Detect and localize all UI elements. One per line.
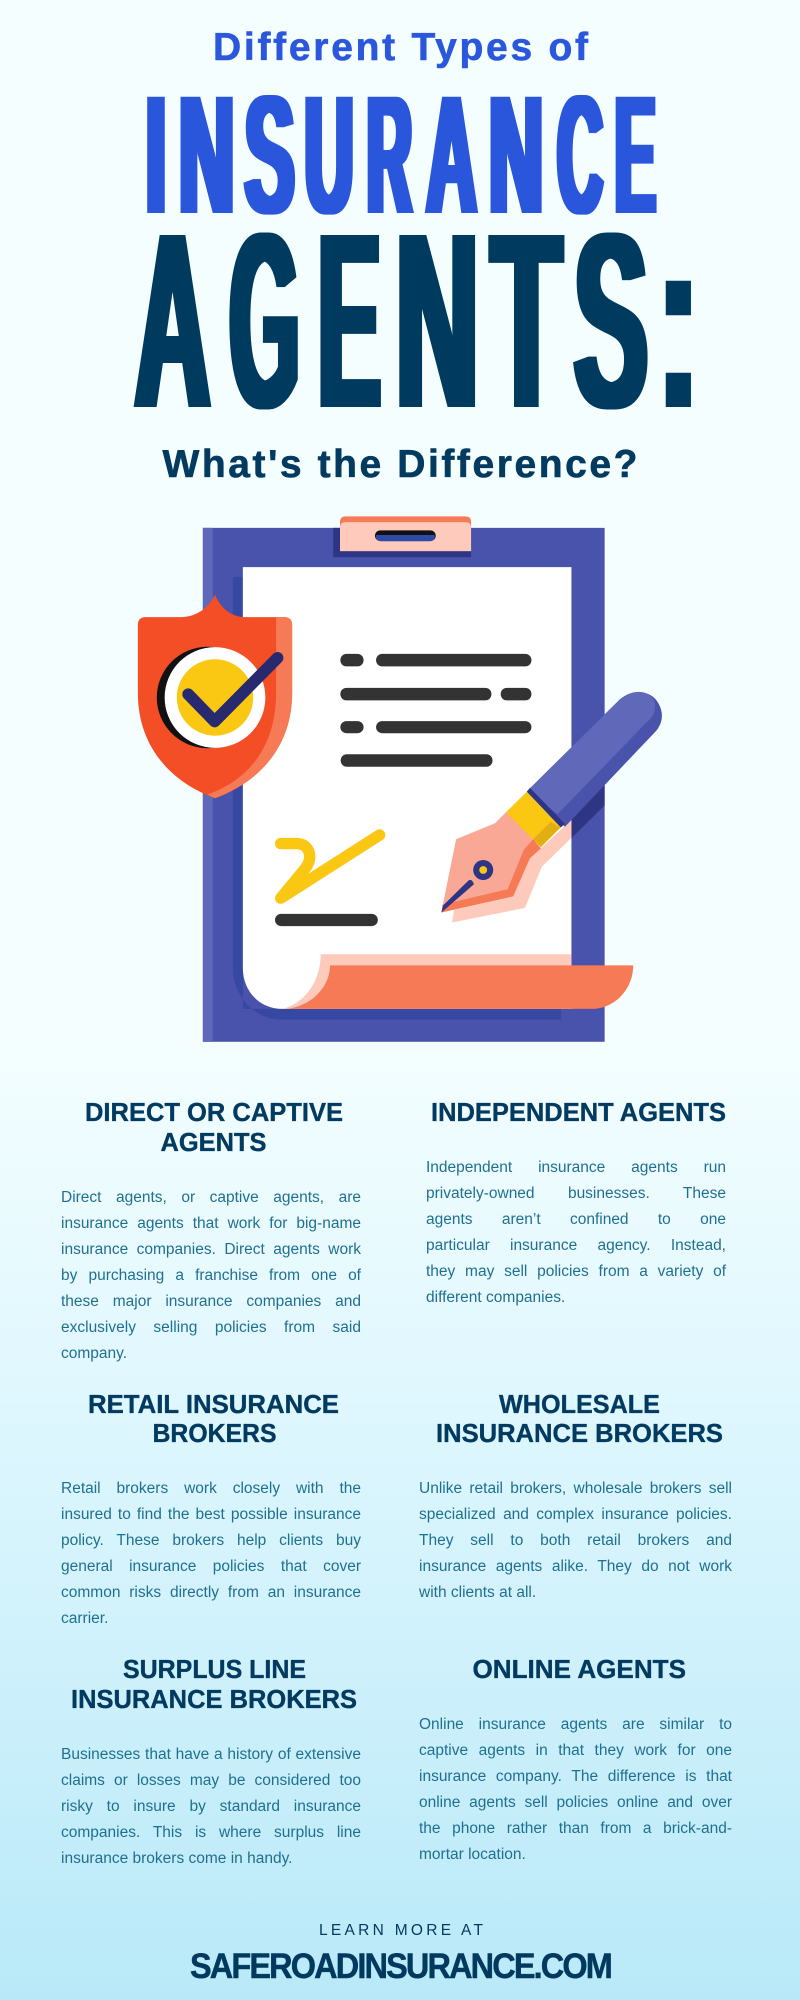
title line: INSURANCE: E xyxy=(615,60,655,249)
heading: independent agents: INDEPENDENT AGENTS xyxy=(431,1099,726,1127)
text: surplus line brokers description: insurance brokers come in handy. xyxy=(61,1850,292,1867)
clipboard board xyxy=(203,528,605,1042)
text: online agents description: the phone rather than from a brick-and- xyxy=(419,1820,732,1837)
text: wholesale brokers description: specialized and complex insurance policies. xyxy=(419,1506,732,1523)
panel: retail insurance brokers xyxy=(61,1391,361,1627)
text: surplus line brokers description: claims or losses may be considered too xyxy=(61,1772,361,1789)
clipboard clip xyxy=(333,516,471,557)
title line: AGENTS:: N xyxy=(396,182,479,461)
heading: surplus line insurance brokers xyxy=(71,1656,357,1714)
shield with check mark xyxy=(138,595,292,798)
document text lines xyxy=(275,654,531,926)
title line: INSURANCE: C xyxy=(558,60,603,249)
text: independent agents description: Independent insurance agents run xyxy=(426,1159,726,1176)
text: website: SAFEROADINSURANCE.COM xyxy=(190,1947,611,1986)
text: retail brokers description: Retail brokers work closely with the xyxy=(61,1480,361,1497)
title line: INSURANCE xyxy=(146,60,655,250)
text: retail brokers description: general insurance policies that cover xyxy=(61,1558,361,1575)
title line: INSURANCE: S xyxy=(245,60,295,249)
text: wholesale brokers description: Unlike retail brokers, wholesale brokers sell xyxy=(419,1480,732,1497)
text: direct agents description: exclusively selling policies from said xyxy=(61,1319,361,1336)
panel: online agents xyxy=(419,1656,732,1863)
heading: wholesale insurance brokers xyxy=(436,1391,723,1448)
heading: surplus line insurance brokers: SURPLUS LINE xyxy=(123,1656,306,1684)
title line: AGENTS:: E xyxy=(318,180,381,460)
text: surplus line brokers description: companies. This is where surplus line xyxy=(61,1824,361,1841)
panel: direct or captive agents xyxy=(61,1099,361,1362)
text: independent agents description: agents aren’t confined to one xyxy=(426,1211,726,1228)
heading: direct or captive agents: AGENTS xyxy=(160,1129,266,1157)
text: wholesale brokers description: They sell to both retail brokers and xyxy=(419,1532,732,1549)
text: direct agents description: insurance agents that work for big-name xyxy=(61,1215,361,1232)
title line: AGENTS:: : xyxy=(658,181,699,460)
text: surplus line brokers description: Businesses that have a history of extensive xyxy=(61,1746,361,1763)
text: learn more at: LEARN MORE AT xyxy=(319,1922,484,1939)
heading: direct or captive agents: DIRECT OR CAPTIVE xyxy=(85,1099,343,1127)
heading: online agents: ONLINE AGENTS xyxy=(472,1656,686,1684)
signature xyxy=(281,835,380,898)
text: direct agents description: insurance companies. Direct agents work xyxy=(61,1241,361,1258)
heading: retail insurance brokers: RETAIL INSURANCE xyxy=(88,1391,339,1419)
text: independent agents description: privately-owned businesses. These xyxy=(426,1185,726,1202)
text: direct agents description: Direct agents, or captive agents, are xyxy=(61,1189,361,1206)
illustration: clipboard with shield and pen xyxy=(138,516,662,1042)
title line: AGENTS:: G xyxy=(230,181,299,460)
title line: INSURANCE: I xyxy=(146,60,166,249)
title line: AGENTS:: T xyxy=(491,182,562,461)
text: online agents description: insurance company. The difference is that xyxy=(419,1768,732,1785)
title line: INSURANCE: N xyxy=(179,60,234,249)
text: retail brokers description: carrier. xyxy=(61,1610,108,1627)
title line: INSURANCE: N xyxy=(489,60,543,249)
text: wholesale brokers description: insurance agents alike. They do not work xyxy=(419,1558,732,1575)
text: online agents description xyxy=(419,1716,732,1863)
text: online agents description: mortar location. xyxy=(419,1846,526,1863)
heading: retail insurance brokers xyxy=(88,1391,339,1448)
text: direct agents description xyxy=(61,1189,361,1362)
text: direct agents description: these major insurance companies and xyxy=(61,1293,361,1310)
fountain pen xyxy=(441,692,662,922)
heading: wholesale insurance brokers: INSURANCE BROKERS xyxy=(436,1420,723,1448)
text: independent agents description: they may sell policies from a variety of xyxy=(426,1263,726,1280)
panel: independent agents xyxy=(426,1099,726,1306)
panel: surplus line insurance brokers xyxy=(61,1656,361,1867)
text: wholesale brokers description xyxy=(419,1480,732,1601)
panel: wholesale insurance brokers xyxy=(419,1391,732,1601)
text: retail brokers description: common risks directly from an insurance xyxy=(61,1584,361,1601)
text: independent agents description: particular insurance agency. Instead, xyxy=(426,1237,726,1254)
heading: surplus line insurance brokers: INSURANCE BROKERS xyxy=(71,1686,357,1714)
text: surplus line brokers description xyxy=(61,1746,361,1867)
title line: What's the Difference?: What's the Difference? xyxy=(162,443,638,486)
paper curl xyxy=(282,954,633,1009)
text: independent agents description xyxy=(426,1159,726,1306)
heading: wholesale insurance brokers: WHOLESALE xyxy=(499,1391,660,1419)
text: retail brokers description: insured to find the best possible insurance xyxy=(61,1506,361,1523)
text: wholesale brokers description: with clients at all. xyxy=(419,1584,536,1601)
text: online agents description: Online insurance agents are similar to xyxy=(419,1716,732,1733)
footer call to action xyxy=(190,1922,611,1986)
text: online agents description: online agents sell policies online and over xyxy=(419,1794,732,1811)
title line: AGENTS: xyxy=(135,180,699,461)
text: direct agents description: company. xyxy=(61,1345,127,1362)
heading: direct or captive agents xyxy=(85,1099,343,1157)
text: surplus line brokers description: risky to insure by standard insurance xyxy=(61,1798,361,1815)
text: retail brokers description xyxy=(61,1480,361,1627)
title line: INSURANCE: R xyxy=(367,60,412,249)
title line: INSURANCE: A xyxy=(426,61,477,250)
title line: INSURANCE: U xyxy=(305,62,353,250)
text: direct agents description: by purchasing a franchise from one of xyxy=(61,1267,361,1284)
title line: AGENTS:: A xyxy=(135,181,210,461)
text: retail brokers description: policy. These brokers help clients buy xyxy=(61,1532,361,1549)
paper sheet xyxy=(243,567,571,1009)
text: independent agents description: different companies. xyxy=(426,1289,565,1306)
title line: AGENTS:: S xyxy=(574,181,648,460)
text: online agents description: captive agents in that they work for one xyxy=(419,1742,732,1759)
heading: retail insurance brokers: BROKERS xyxy=(152,1420,276,1448)
title line: Different Types of: Different Types of xyxy=(213,26,589,69)
title block xyxy=(134,26,699,486)
